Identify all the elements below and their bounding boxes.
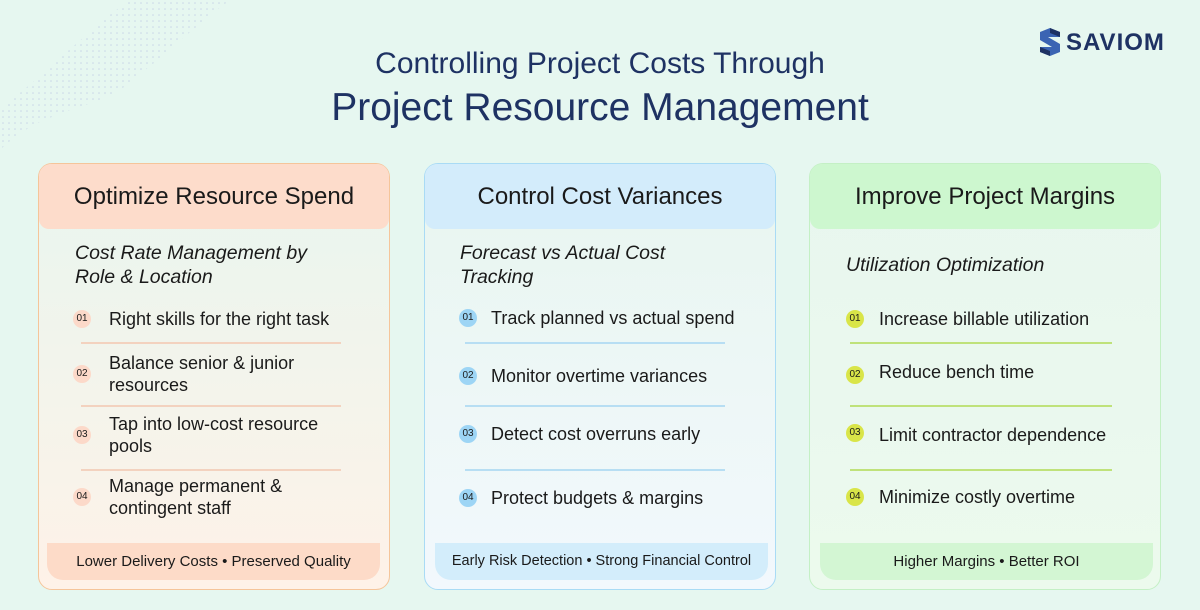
title [331, 47, 869, 129]
heading [39, 164, 389, 229]
item 01 [459, 308, 734, 328]
subtitle: Role & Location [75, 266, 213, 288]
panel: improve project margins: Increase billable utilization [879, 309, 1089, 329]
panel: optimize resource spend [38, 163, 390, 590]
footer: Higher Margins • Better ROI [893, 553, 1080, 570]
item 03 [73, 414, 318, 456]
logo: SAVIOM [1066, 29, 1165, 56]
panel: improve project margins: 04 [849, 491, 861, 502]
panel: improve project margins: 02 [849, 369, 861, 380]
decorative dot wave [2, 2, 226, 148]
item 04: Manage permanent & [109, 476, 282, 496]
item 02: Balance senior & junior [109, 353, 294, 373]
panel: control cost variances: Detect cost overruns early [491, 424, 700, 444]
footer: Lower Delivery Costs • Preserved Quality [76, 553, 351, 570]
footer [435, 543, 768, 580]
item 04 [846, 487, 1075, 507]
subtitle: Cost Rate Management by [75, 242, 307, 264]
panel: optimize resource spend: 01 [76, 313, 88, 324]
footer [820, 543, 1153, 580]
panel: improve project margins: Limit contractor dependence [879, 425, 1106, 445]
panel: control cost variances: Monitor overtime variances [491, 366, 707, 386]
item 04: contingent staff [109, 498, 231, 518]
item 03: 03 [76, 429, 88, 440]
subtitle [460, 242, 666, 288]
item 02 [73, 353, 294, 395]
panel: control cost variances: 02 [462, 370, 474, 381]
subtitle: Utilization Optimization [846, 254, 1044, 276]
item 04: 04 [76, 491, 88, 502]
panel: improve project margins: Minimize costly overtime [879, 487, 1075, 507]
item 01 [73, 309, 330, 329]
subtitle: Forecast vs Actual Cost [460, 242, 665, 264]
subtitle: Tracking [460, 266, 533, 288]
item 02 [846, 362, 1034, 384]
title: Controlling Project Costs Through [375, 47, 825, 80]
panel: improve project margins: 03 [849, 427, 861, 438]
footer: Early Risk Detection • Strong Financial Control [452, 553, 751, 569]
panel: control cost variances: Track planned vs actual spend [491, 308, 734, 328]
item 03: pools [109, 436, 152, 456]
heading [425, 164, 775, 229]
heading [810, 164, 1160, 229]
item 03: Tap into low-cost resource [109, 414, 318, 434]
panel: control cost variances [424, 163, 776, 590]
panel: control cost variances: 03 [462, 428, 474, 439]
panel: improve project margins [809, 163, 1161, 590]
footer [47, 543, 380, 580]
panel: optimize resource spend: Right skills for the right task [109, 309, 329, 329]
panel: improve project margins: Reduce bench time [879, 362, 1034, 382]
subtitle [75, 242, 308, 288]
panel: control cost variances: Protect budgets & margins [491, 488, 703, 508]
item 03 [459, 424, 700, 444]
item 03 [846, 424, 1106, 445]
title: Project Resource Management [331, 86, 869, 129]
icon: saviom [1040, 28, 1060, 56]
heading: Control Cost Variances [478, 183, 722, 210]
panel: control cost variances: 04 [462, 492, 474, 503]
heading: Optimize Resource Spend [74, 183, 354, 210]
item 04 [459, 488, 703, 508]
item 01 [846, 309, 1089, 329]
item 02: resources [109, 375, 188, 395]
panel: control cost variances: 01 [462, 312, 474, 323]
item 04 [73, 476, 282, 518]
heading: Improve Project Margins [855, 183, 1115, 210]
item 02 [459, 366, 707, 386]
item 02: 02 [76, 368, 88, 379]
panel: improve project margins: 01 [849, 313, 861, 324]
